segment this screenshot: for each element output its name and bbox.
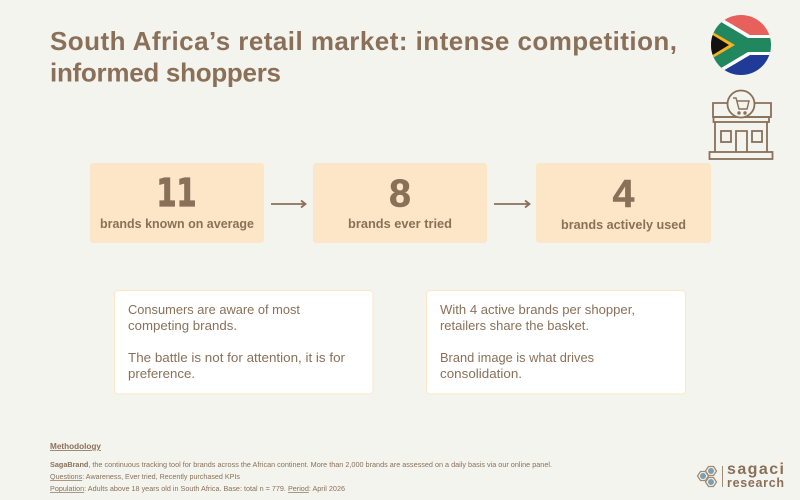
panel: basket insight: With 4 active brands per shopper, (440, 302, 635, 317)
panel: brands used: brands actively used (561, 217, 686, 232)
panel: awareness insight: preference. (128, 366, 195, 381)
panel: awareness insight: competing brands. (128, 318, 237, 333)
panel: brands tried: 8 (389, 172, 411, 216)
logo: Sagaci Research: sagaci (727, 461, 784, 478)
arrow: tried to used (494, 200, 530, 208)
panel: brands known: brands known on average (100, 216, 254, 231)
panel: basket insight: Brand image is what drives (440, 350, 594, 365)
panel: brands known: 11 (156, 171, 196, 216)
methodology text (50, 462, 552, 493)
panel: brands known (90, 163, 264, 243)
arrow: known to tried (271, 200, 306, 208)
methodology text: SagaBrand, the continuous tracking tool for brands across the African continent. More than 2,000 brands are assessed on a daily basis via our online panel. (50, 462, 552, 469)
panel: brands tried: brands ever tried (348, 216, 452, 231)
methodology text: Questions: Awareness, Ever tried, Recently purchased KPIs (50, 474, 241, 481)
panel: awareness insight: The battle is not for attention, it is for (128, 350, 346, 365)
icon: South Africa flag (711, 12, 771, 78)
panel: awareness insight: Consumers are aware of most (128, 302, 300, 317)
panel: basket insight: consolidation. (440, 366, 522, 381)
title: South Africa’s retail market: intense competition, (50, 26, 677, 56)
icon: shop with basket (710, 90, 772, 159)
panel: brands used: 4 (613, 173, 635, 216)
panel: basket insight: retailers share the basket. (440, 318, 589, 333)
methodology heading: Methodology (50, 442, 102, 451)
logo: Sagaci Research: research (727, 476, 784, 490)
methodology text: Population: Adults above 18 years old in South Africa. Base: total n = 779. Period: April 2026 (50, 486, 345, 493)
panel: brands tried (313, 163, 487, 243)
panel: basket insight (426, 290, 686, 394)
logo: Sagaci Research (698, 461, 784, 490)
title (50, 26, 677, 88)
panel: awareness insight (114, 290, 373, 394)
title: informed shoppers (50, 58, 281, 88)
panel: brands used (536, 163, 711, 243)
